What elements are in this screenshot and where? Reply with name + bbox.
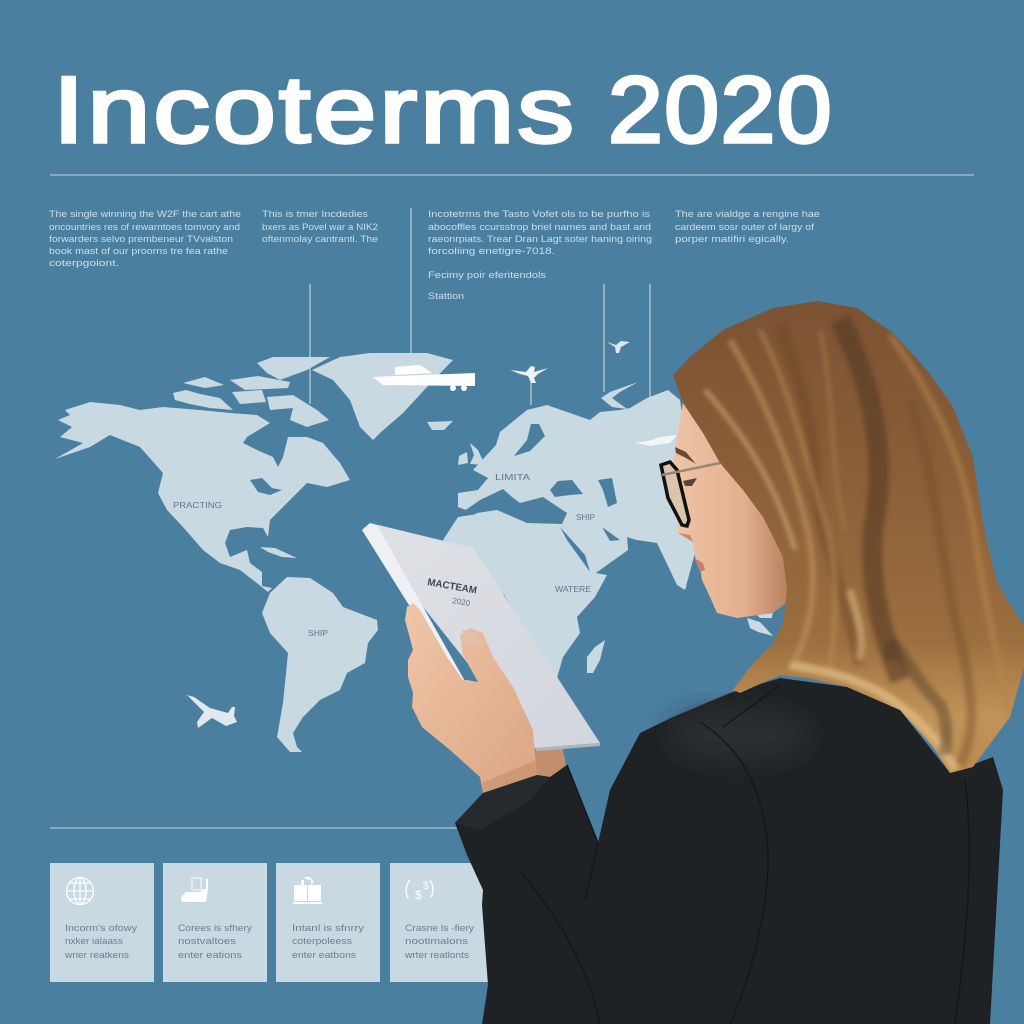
text block: column 1 [49, 209, 241, 269]
map: Caribbean [260, 547, 297, 558]
text block: column 4: porper matifiri egically. [675, 234, 789, 245]
map: Eurasia [458, 390, 695, 590]
map: Southeast Asia islands [747, 610, 777, 637]
panel: card 4: wrter reatlonts [404, 950, 469, 961]
text block: column 2 [262, 209, 378, 245]
map: Africa [443, 510, 607, 680]
text block: column 3: forcoliing enetigre-7018. [428, 246, 555, 257]
text block: column 3: Incotetrms the Tasto Vofet ols to be purfho is [428, 209, 650, 220]
jacket shoulder highlight [670, 709, 810, 761]
panel: card 3: coterpoleess [292, 936, 352, 947]
icon: circular currency: $ [423, 880, 429, 892]
panel: card 4 [390, 863, 494, 982]
text block: column 3: Fecimy poir eferitendols [428, 270, 546, 281]
title: 2020 [608, 58, 832, 162]
inland seas and lakes [179, 424, 620, 605]
map: Russian crescent island [601, 382, 638, 409]
report booklet: 2020 [452, 596, 471, 608]
panel: card 2: nostvaltoes [178, 936, 236, 947]
icon: plane top [510, 366, 548, 383]
panel: card 3: enter eatbons [292, 950, 356, 961]
map: South America [262, 577, 378, 752]
map labels: WATERE [555, 585, 591, 594]
map labels: LIMITA [495, 473, 531, 482]
text block: column 3 [428, 209, 652, 302]
map: Sri Lanka [682, 584, 686, 588]
text block: column 2: bxers as Povel war a NIK2 [262, 222, 378, 233]
map labels: PRACTING [173, 501, 222, 510]
text block: column 2: oftenmolay cantranti. The [262, 234, 378, 245]
icon: plane lower left [187, 695, 237, 728]
icon: globe [66, 878, 94, 904]
report booklet [362, 523, 600, 751]
text block: column 3: Stattion [428, 291, 464, 302]
panel: card 1: Incorm's ofowy [65, 923, 137, 934]
panel: card 4: Crasne ls ·fiery [405, 923, 474, 934]
text block: column 4: The are vialdge a rengine hae [675, 209, 820, 220]
map: Greenland [312, 353, 453, 440]
map: Arctic islands [173, 357, 330, 427]
text block: column 4 [675, 209, 820, 245]
pointer lines [310, 208, 650, 405]
report booklet: MACTEAM [426, 577, 478, 597]
icon: ship on Greenland [373, 365, 475, 391]
jacket [455, 678, 1003, 1024]
hair strands [705, 320, 1010, 770]
text block: column 3: raeonrpiats. Trear Dran Lagt soter haning oiring [428, 234, 652, 245]
text block: column 1: coterpgoiont. [49, 258, 119, 269]
panel: card 2 [163, 863, 267, 982]
panel: card 2: Corees is sfhery [178, 923, 252, 934]
hair [673, 301, 1024, 773]
panel: card 1 [50, 863, 154, 982]
icon: boxes [293, 877, 322, 904]
world map [55, 353, 777, 752]
panel: card 1: wrier reatkens [64, 950, 129, 961]
map: North America [55, 402, 350, 592]
icon: circular currency [406, 880, 433, 902]
map: Central Asia and Arabia fill [540, 470, 692, 577]
person reading a report [362, 301, 1024, 1024]
map: Iceland [427, 421, 453, 430]
text block: column 4: cardeem sosr outer of largy of [675, 222, 814, 233]
icon: small ship right [635, 435, 677, 446]
back wrist [535, 745, 566, 778]
panel: card 4: nootimalons [405, 936, 468, 947]
text block: column 3: abocoffles ccursstrop briel names and bast and [428, 222, 651, 233]
title [53, 58, 832, 163]
text block: column 1: book mast of our proorns tre fea rathe [49, 246, 228, 257]
map labels: SHIP [308, 629, 328, 638]
map labels: SHIP [576, 513, 595, 522]
thumbnail [462, 630, 478, 644]
title: Incoterms [53, 58, 574, 163]
text block: column 1: The single winning the W2F the cart athe [49, 209, 241, 220]
panel: card 2: enter eations [178, 950, 242, 961]
jacket folds and seams [520, 685, 969, 1024]
face [673, 400, 790, 618]
panel: card 1: nxker ialaass [65, 936, 123, 947]
text block: column 1: forwarders selvo prembeneur TVvalston [49, 234, 233, 245]
sleeve cuff edge [455, 775, 550, 830]
panel: card 3 [276, 863, 380, 982]
hand holding report [405, 603, 537, 793]
icon: truck and forklift [181, 878, 208, 902]
map: UK and Ireland [458, 443, 485, 465]
panel: card 3: Intanl is sfnrry [292, 923, 364, 934]
eyebrow eye and lips [675, 447, 705, 572]
map labels [173, 473, 595, 638]
text block: column 2: This is tmer Incdedies [262, 209, 368, 220]
icon: plane upper right [607, 341, 630, 353]
eyeglasses [661, 462, 720, 526]
icon: circular currency: $ [415, 888, 422, 902]
text block: column 1: oncountries res of rewarntoes tomvory and [49, 222, 240, 233]
map: Madagascar [587, 640, 605, 673]
